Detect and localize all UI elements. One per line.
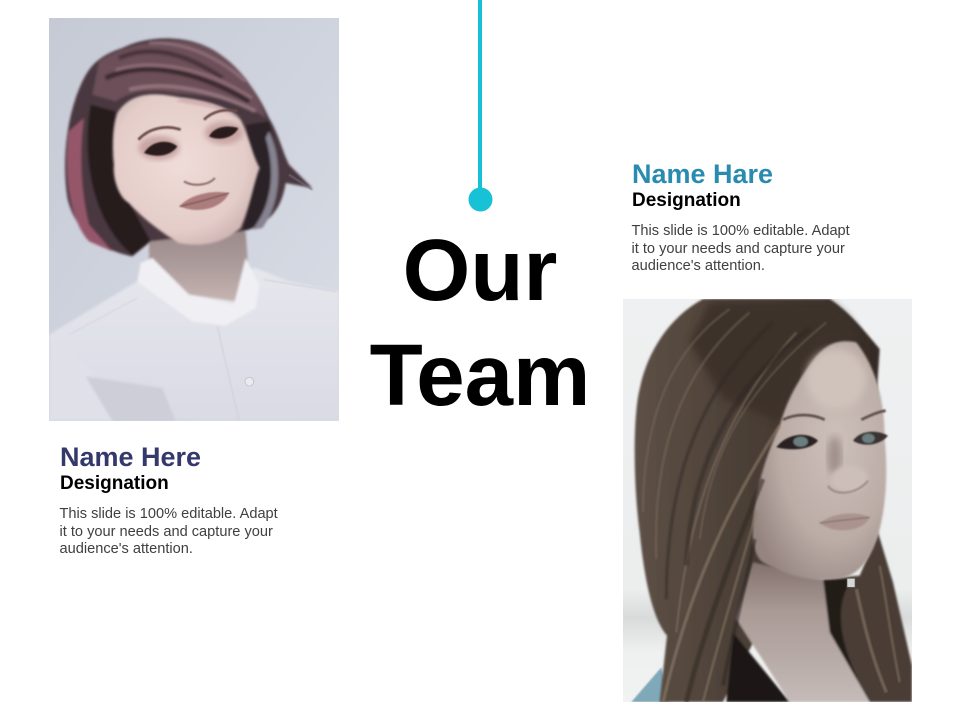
title: Our — [403, 222, 557, 319]
name: right person: Name Hare — [632, 159, 773, 189]
title — [370, 222, 590, 424]
blue top — [631, 667, 670, 702]
description: left person: audience's attention. — [60, 541, 193, 557]
description: left person: This slide is 100% editable. Adapt — [60, 506, 278, 522]
description: right person: it to your needs and capture your — [632, 241, 845, 257]
photo: woman with long hair — [623, 299, 912, 702]
title: Team — [370, 327, 590, 424]
connector line with dot — [468, 0, 492, 212]
earring — [847, 578, 855, 587]
text block: left person — [60, 442, 278, 557]
description: right person: audience's attention. — [632, 258, 765, 274]
name: left person: Name Here — [60, 442, 201, 472]
description: right person: This slide is 100% editable. Adapt — [632, 223, 850, 239]
shirt button — [245, 377, 254, 386]
description: right person — [632, 223, 850, 274]
description: left person — [60, 506, 278, 557]
designation: left person: Designation — [60, 473, 169, 494]
text block: right person — [632, 159, 850, 274]
photo: woman with short hair — [49, 18, 339, 421]
designation: right person: Designation — [632, 190, 741, 211]
description: left person: it to your needs and capture your — [60, 524, 273, 540]
